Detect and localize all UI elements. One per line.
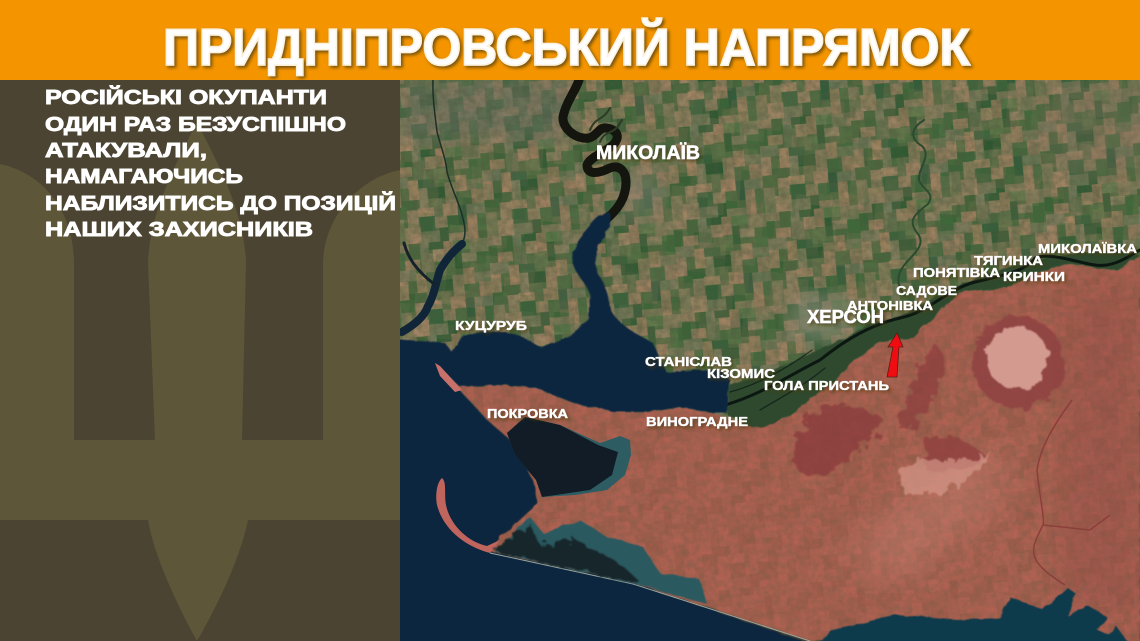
title: ПРИДНІПРОВСЬКИЙ НАПРЯМОК: [163, 18, 970, 77]
rivers north of the Dnipro: [402, 80, 930, 332]
label: Kutsurub: КУЦУРУБ: [455, 318, 527, 333]
label: Poniativka: ПОНЯТІВКА: [913, 265, 1001, 280]
arrow: attack direction: [887, 333, 903, 377]
text block: situation summary: АТАКУВАЛИ,: [45, 140, 207, 162]
map: satellite view of the Dnipro region: [395, 80, 1140, 641]
water: estuaries and the Black Sea: [395, 212, 815, 641]
label: Pokrovka: ПОКРОВКА: [487, 406, 569, 421]
occupied land: red overlay: [435, 256, 1140, 641]
icon: trident emblem: [0, 122, 400, 641]
label: Kherson: ХЕРСОН: [807, 307, 884, 327]
Tendra spit: [436, 478, 500, 553]
map labels: [455, 143, 1138, 429]
label: Vynohradne: ВИНОГРАДНЕ: [646, 414, 748, 429]
text block: situation summary: НАБЛИЗИТИСЬ ДО ПОЗИЦІЙ: [45, 191, 396, 215]
label: Tiahynka: ТЯГИНКА: [974, 253, 1044, 268]
Yahorlyk bay: [495, 517, 707, 604]
southern coast water: [820, 587, 1130, 641]
label: Krynky: КРИНКИ: [1003, 269, 1065, 284]
text block: situation summary: НАМАГАЮЧИСЬ: [45, 166, 243, 188]
label: Hola Prystan: ГОЛА ПРИСТАНЬ: [764, 378, 889, 393]
left panel: dark olive background with trident: [0, 80, 400, 641]
red land terrain texture: [400, 250, 1140, 641]
label: Stanislav: СТАНІСЛАВ: [645, 354, 732, 369]
label: Mykolaiv: МИКОЛАЇВ: [596, 143, 700, 164]
text block: situation summary: [45, 85, 396, 241]
Dzharylhach lagoon: [507, 417, 631, 497]
Dnipro river channel: [725, 250, 1140, 410]
farmland: [400, 80, 1140, 420]
text block: situation summary: ОДИН РАЗ БЕЗУСПІШНО: [45, 114, 346, 136]
label: Antonivka: АНТОНІВКА: [847, 298, 934, 313]
Dnipro delta: dark green floodplain: [727, 252, 1140, 427]
text block: situation summary: НАШИХ ЗАХИСНИКІВ: [45, 219, 313, 241]
text block: situation summary: РОСІЙСЬКІ ОКУПАНТИ: [45, 85, 327, 109]
label: Kizomys: КІЗОМИС: [707, 366, 776, 381]
thin sea barrier: [490, 553, 810, 641]
label: Mykolaivka: МИКОЛАЇВКА: [1038, 241, 1138, 256]
Kinburn spit tip: [435, 363, 462, 392]
title banner: [0, 0, 1140, 80]
label: Sadove: САДОВЕ: [896, 283, 957, 298]
